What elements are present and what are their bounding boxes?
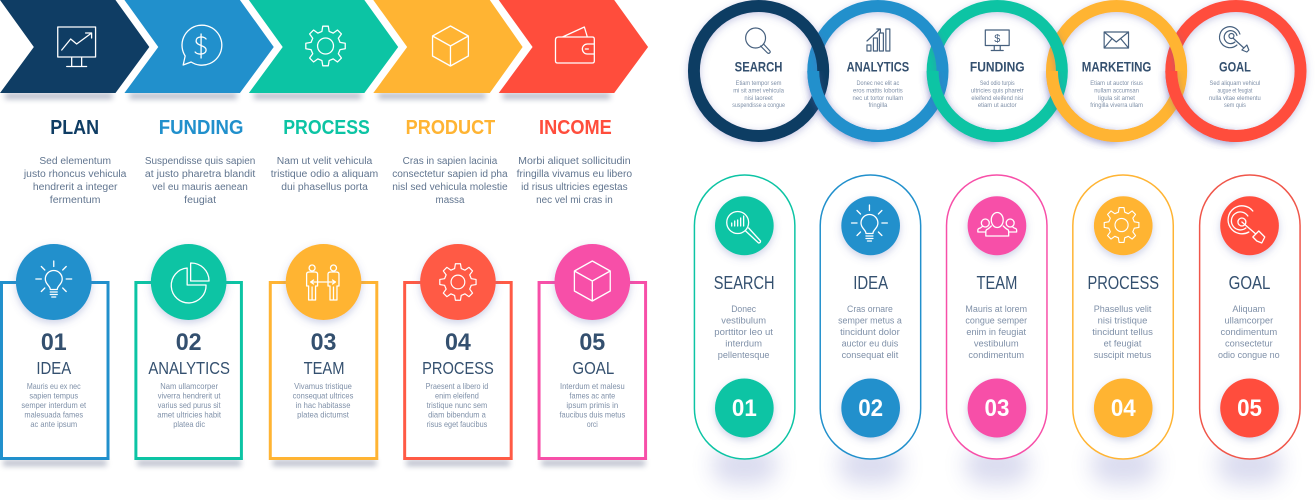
- ring text: analytics: fringilla: [868, 102, 888, 109]
- text: plan description: fermentum: [50, 195, 101, 206]
- heading: INCOME: INCOME: [539, 117, 612, 139]
- text: income description: fringilla vivamus eu libero: [517, 169, 632, 180]
- pill: 02 idea: semper metus a: [838, 315, 902, 327]
- ring text: search: SEARCH: [735, 58, 782, 75]
- card: 01 idea: semper interdum et: [21, 401, 87, 410]
- pill: 01 search: porttitor leo ut: [714, 327, 773, 338]
- card: 05 goal: faucibus duis metus: [559, 410, 625, 420]
- chevron: product: [373, 0, 523, 93]
- pill: 04 process: nisi tristique: [1098, 315, 1147, 327]
- card: 01 idea: [1, 244, 108, 458]
- text: funding description: Suspendisse quis sapien: [145, 156, 256, 167]
- ring text: search: mi sit amet vehicula: [733, 87, 784, 95]
- pill: 03 team: condimentum: [968, 350, 1024, 361]
- pill: 05 goal: odio congue no: [1218, 350, 1280, 361]
- ring text: analytics: nec ut tortor nullam: [853, 95, 903, 102]
- icon: dollar speech bubble: [182, 25, 222, 65]
- card: 02 analytics: 02: [176, 329, 202, 356]
- pill: 03 team: enim in feugiat: [966, 327, 1026, 338]
- panel: pill shadows: [712, 445, 1283, 485]
- ring text: goal: [1209, 27, 1261, 109]
- pill: 03 team: TEAM: [977, 273, 1017, 293]
- card: 01 idea: sapien tempus: [29, 391, 78, 401]
- ring text: analytics: Donec nec elit ac: [857, 80, 899, 87]
- pill: 01 search: pellentesque: [718, 350, 770, 361]
- pill: 04 process: et feugiat: [1104, 338, 1142, 350]
- card: 05 goal: orci: [587, 420, 598, 429]
- card: 04 process: 04: [445, 329, 472, 356]
- ring text: goal: Sed aliquam vehicul: [1210, 80, 1260, 87]
- card: 02 analytics: viverra hendrerit ut: [158, 391, 221, 401]
- text: process description: Nam ut velit vehicula: [277, 156, 372, 167]
- pill: 02 idea: [820, 175, 921, 459]
- card: 05 goal: GOAL: [572, 358, 614, 378]
- ring text: analytics: eros mattis lobortis: [853, 87, 903, 95]
- card: 02 analytics: [136, 244, 241, 458]
- ring text: search: suspendisse a congue: [732, 102, 785, 109]
- panel: card shadows: [3, 460, 645, 466]
- text: plan description: [23, 156, 127, 206]
- card: 01 idea: IDEA: [36, 358, 71, 378]
- ring text: marketing: MARKETING: [1082, 58, 1151, 75]
- pill: 04 process: suscipit metus: [1094, 350, 1152, 361]
- text: plan description: hendrerit a integer: [33, 182, 118, 193]
- card: 03 team: platea dictumst: [297, 410, 350, 420]
- card: 04 process: PROCESS: [422, 358, 494, 378]
- text: funding description: feugiat: [184, 195, 216, 206]
- pill: 05 goal: Aliquam: [1232, 304, 1265, 315]
- text: process description: [271, 156, 379, 193]
- text: income description: Morbi aliquet sollicitudin: [518, 156, 631, 167]
- card: 03 team: Vivamus tristique: [294, 382, 352, 391]
- text: product description: consectetur sapien id pha: [392, 169, 508, 180]
- ring text: marketing: Etiam ut auctor risus: [1090, 80, 1143, 87]
- card: 03 team: consequat ultrices: [293, 391, 353, 401]
- card: 02 analytics: platea dic: [173, 420, 205, 429]
- ring text: goal: augue et feugiat: [1218, 87, 1253, 95]
- icon: wallet: [555, 27, 594, 63]
- pill: 01 search: 01: [732, 395, 757, 422]
- pill: 01 search: Donec: [731, 304, 756, 315]
- text: plan description: Sed elementum: [39, 156, 111, 167]
- text: funding description: [145, 156, 256, 206]
- card: 03 team: in hac habitasse: [296, 401, 351, 410]
- text: product description: massa: [436, 195, 465, 206]
- card: 05 goal: ipsum primis in: [566, 401, 618, 410]
- pill: 05 goal: 05: [1237, 395, 1262, 422]
- pill: 05 goal: condimentum: [1221, 327, 1277, 338]
- card: 04 process: [405, 244, 511, 458]
- pill: 04 process: 04: [1111, 395, 1136, 422]
- pill: 02 idea: Cras ornare: [847, 304, 893, 315]
- card: 04 process: Praesent a libero id: [426, 382, 488, 391]
- pill: 05 goal: ullamcorper: [1224, 315, 1273, 327]
- pill: 05 goal: consectetur: [1225, 338, 1273, 350]
- card: 03 team: 03: [311, 329, 336, 356]
- heading: PRODUCT: PRODUCT: [406, 117, 495, 139]
- panel: arrow process steps: [0, 0, 648, 99]
- pill: 01 search: SEARCH: [714, 273, 774, 293]
- card: 04 process: risus eget faucibus: [427, 420, 487, 429]
- card: 04 process: diam bibendum a: [428, 410, 486, 420]
- pill: 05 goal: GOAL: [1229, 273, 1270, 293]
- chevron: income: [499, 0, 648, 93]
- heading: PLAN: PLAN: [50, 117, 99, 139]
- ring text: funding: FUNDING: [970, 58, 1025, 75]
- ring text: funding: etiam ut auctor: [978, 102, 1017, 109]
- ring text: marketing: nullam accumsan: [1094, 87, 1139, 95]
- pill: 01 search: [694, 175, 795, 459]
- text: income description: [517, 156, 632, 206]
- pill: 02 idea: IDEA: [853, 273, 888, 293]
- pill: 04 process: PROCESS: [1087, 273, 1159, 293]
- pill: 02 idea: consequat elit: [842, 350, 899, 361]
- card: 02 analytics: varius sed purus sit: [158, 401, 221, 410]
- ring text: analytics: ANALYTICS: [847, 58, 909, 75]
- card: 05 goal: Interdum et malesu: [560, 382, 625, 391]
- pill: 01 search: interdum: [725, 338, 762, 350]
- ring text: search: Etiam tempor sem: [736, 80, 781, 87]
- ring text: goal: nulla vitae elementu: [1209, 95, 1261, 102]
- pill: 03 team: vestibulum: [974, 338, 1019, 350]
- ring text: funding: ultricies quis pharetr: [971, 87, 1024, 95]
- card: 01 idea: Mauris eu ex nec: [27, 382, 81, 391]
- text: funding description: vel eu mauris aenean: [152, 182, 248, 193]
- card: 01 idea: ac ante ipsum: [30, 420, 77, 429]
- pill: 03 team: congue semper: [965, 315, 1027, 327]
- ring text: funding: Sed odio turpis: [980, 80, 1015, 87]
- heading: FUNDING: FUNDING: [159, 117, 243, 139]
- card: 04 process: tristique nunc sem: [427, 401, 488, 410]
- pill: 04 process: tincidunt tellus: [1092, 327, 1153, 338]
- pill: 05 goal: [1200, 175, 1300, 459]
- ring text: search: [732, 28, 785, 109]
- text: income description: id risus ultricies egestas: [521, 182, 628, 193]
- card: 05 goal: [539, 244, 646, 458]
- pill: 03 team: Mauris at lorem: [965, 304, 1027, 315]
- pill: 01 search: vestibulum: [721, 315, 766, 327]
- card: 05 goal: fames ac ante: [569, 391, 616, 401]
- pill: 04 process: Phasellus velit: [1094, 304, 1152, 315]
- ring text: search: nisi laoreet: [744, 95, 773, 102]
- ring text: funding: eleifend eleifend nisi: [971, 95, 1023, 102]
- text: product description: nisl sed vehicula molestie: [392, 182, 508, 193]
- pill: 03 team: 03: [985, 395, 1009, 422]
- card: 03 team: [270, 244, 377, 458]
- pill: 03 team: [947, 175, 1047, 459]
- text: product description: [392, 156, 508, 206]
- pill: 02 idea: 02: [858, 395, 883, 422]
- card: 02 analytics: Nam ullamcorper: [160, 382, 218, 391]
- heading: PROCESS: PROCESS: [283, 117, 370, 139]
- ring text: analytics: [847, 29, 909, 109]
- ring text: funding: $: [994, 33, 1000, 45]
- pill: 02 idea: tincidunt dolor: [840, 327, 900, 338]
- ring text: marketing: [1082, 32, 1151, 109]
- chevron: plan: [0, 0, 149, 93]
- pill: 04 process: [1073, 175, 1173, 459]
- ring text: marketing: fringilla viverra ullam: [1090, 102, 1143, 109]
- panel: right infographic: [694, 6, 1301, 485]
- text: process description: tristique odio a aliquam: [271, 169, 379, 180]
- ring text: goal: sem quis: [1224, 102, 1246, 109]
- chevron: process: [249, 0, 398, 93]
- icon: box: [433, 26, 468, 66]
- card: 01 idea: malesuada fames: [24, 410, 83, 420]
- icon: gear: [306, 26, 345, 66]
- text: product description: Cras in sapien lacinia: [403, 156, 497, 167]
- text: funding description: at justo pharetra blandit: [145, 169, 255, 180]
- panel: interlocked rings: [694, 6, 1301, 136]
- text: plan description: justo rhoncus vehicula: [23, 169, 127, 180]
- card: 03 team: TEAM: [304, 358, 344, 378]
- text: income description: nec vel mi cras in: [536, 195, 613, 206]
- card: 02 analytics: ANALYTICS: [148, 358, 230, 378]
- card: 02 analytics: amet ultricies habit: [157, 410, 222, 420]
- pill: 02 idea: auctor eu duis: [842, 338, 899, 350]
- card: 05 goal: 05: [579, 329, 605, 356]
- card: 01 idea: 01: [41, 329, 67, 356]
- panel: left infographic: [0, 0, 648, 466]
- ring text: goal: GOAL: [1219, 58, 1251, 75]
- card: 04 process: enim eleifend: [435, 391, 479, 401]
- chevron shadows: [5, 93, 610, 99]
- ring text: funding: [970, 30, 1025, 109]
- chevron: funding: [124, 0, 274, 93]
- icon: monitor chart: [58, 27, 96, 66]
- ring text: marketing: ligula sit amet: [1098, 95, 1135, 102]
- text: process description: dui phasellus porta: [281, 182, 368, 193]
